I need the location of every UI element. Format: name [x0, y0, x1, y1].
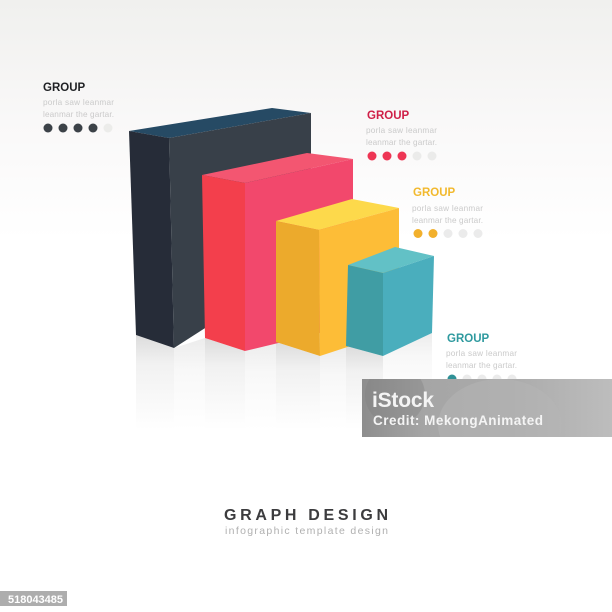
floor reflections	[136, 333, 432, 430]
dark block	[129, 108, 311, 348]
legend: yellow group: leanmar the gartar.	[412, 216, 483, 225]
teal block	[346, 247, 434, 356]
legend: teal group	[446, 333, 517, 384]
subtitle: infographic template design	[225, 525, 388, 537]
legend: teal group: porla saw leanmar	[446, 349, 517, 358]
red block	[202, 153, 353, 351]
watermark banner: iStock	[372, 389, 434, 412]
legend: teal group: leanmar the gartar.	[446, 361, 517, 370]
stock id tag: 518043485	[8, 594, 63, 606]
watermark banner	[362, 379, 612, 437]
legend: red group: GROUP	[367, 110, 410, 122]
stock id tag	[0, 591, 67, 606]
legend: dark group: leanmar the gartar.	[43, 110, 114, 119]
legend: red group	[366, 110, 437, 160]
legend: dark group: GROUP	[43, 82, 86, 94]
watermark banner: Credit: MekongAnimated	[373, 413, 543, 428]
legend: red group: porla saw leanmar	[366, 126, 437, 135]
legend: dark group	[43, 82, 114, 132]
legend: yellow group: GROUP	[413, 187, 456, 199]
legend: dark group: porla saw leanmar	[43, 98, 114, 107]
legend: teal group: GROUP	[447, 333, 490, 345]
legend: yellow group: porla saw leanmar	[412, 204, 483, 213]
legend: red group: leanmar the gartar.	[366, 138, 437, 147]
legend: yellow group	[412, 187, 483, 238]
yellow block	[276, 199, 399, 356]
title: GRAPH DESIGN	[224, 507, 390, 524]
